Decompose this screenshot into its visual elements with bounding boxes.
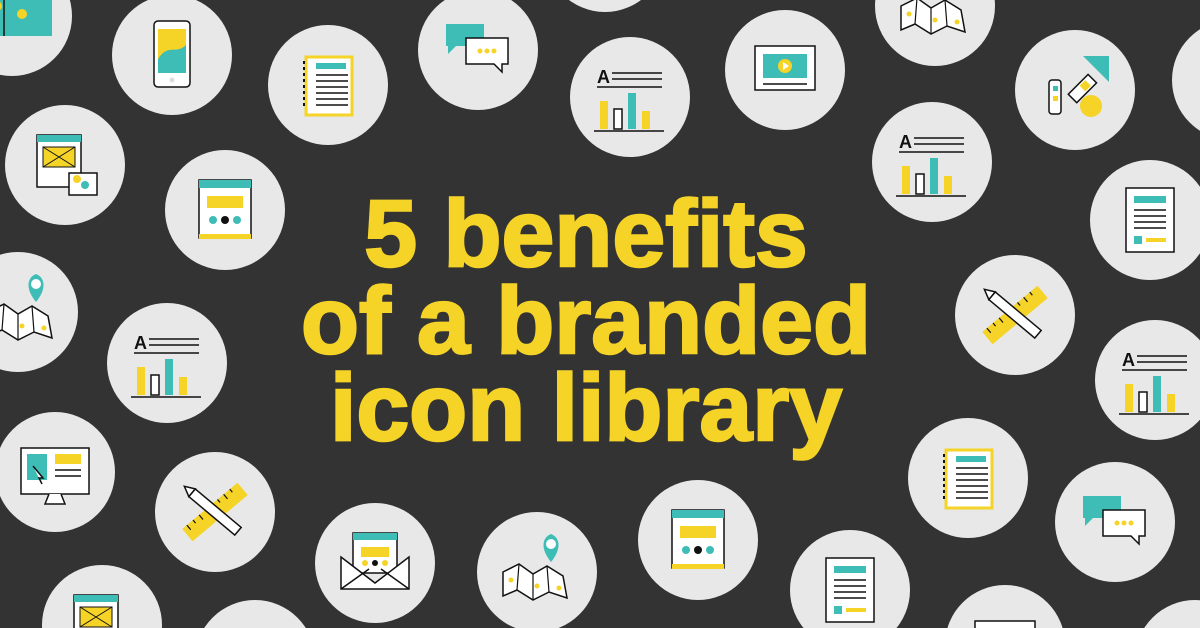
circle icon: mail (5, 105, 125, 225)
circle icon: map bottom (477, 512, 597, 628)
circle icon: ruler right (955, 255, 1075, 375)
circle icon: doc right (1090, 160, 1200, 280)
circle icon: tools (1015, 30, 1135, 150)
circle partial right top (1172, 20, 1200, 140)
circle icon: card left (165, 150, 285, 270)
circle icon: chart far right (1095, 320, 1200, 440)
circle icon: pattern top-left (0, 0, 72, 76)
circle partial bottom right (945, 585, 1065, 628)
circle icon: list (268, 25, 388, 145)
circle partial corner (1135, 600, 1200, 628)
circle icon: video (725, 10, 845, 130)
circle icon: map left (0, 252, 78, 372)
circle icon: chart left (107, 303, 227, 423)
circle icon: list right (908, 418, 1028, 538)
circle icon: phone (112, 0, 232, 115)
circle icon: card bottom (638, 480, 758, 600)
circle icon: chart top (570, 37, 690, 157)
title: 5 benefits (364, 181, 808, 287)
circle icon: ruler left (155, 452, 275, 572)
circle icon: doc bottom (790, 530, 910, 628)
title: of a branded (301, 268, 871, 374)
circle icon: envelope (315, 503, 435, 623)
circle partial bottom (195, 600, 315, 628)
circle icon: chat top (418, 0, 538, 110)
circle partial top (545, 0, 665, 12)
circle icon: chat right (1055, 462, 1175, 582)
title (301, 181, 871, 461)
circle icon: chart right (872, 102, 992, 222)
circle icon: screen (0, 412, 115, 532)
title: icon library (330, 355, 842, 461)
circle icon: map top (875, 0, 995, 66)
circle icon: mail bottom (42, 565, 162, 628)
